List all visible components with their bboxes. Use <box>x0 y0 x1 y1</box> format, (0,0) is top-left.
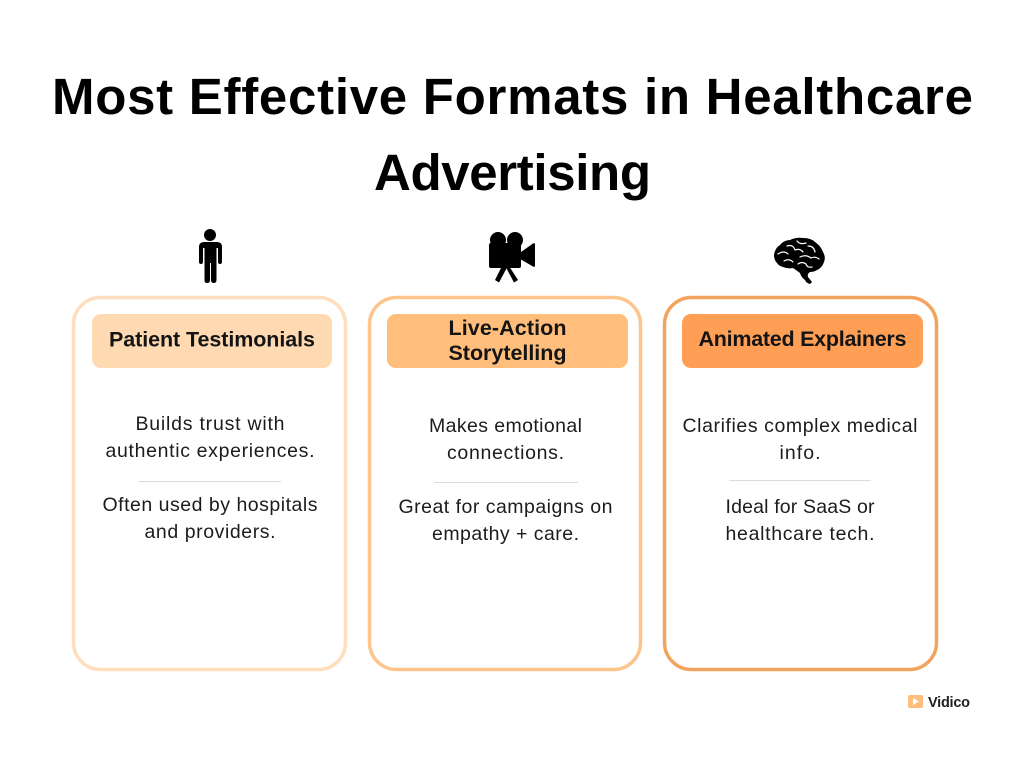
title: Most Effective Formats in Healthcare <box>52 68 973 125</box>
title <box>52 68 973 201</box>
body text: Makes emotional <box>429 415 582 437</box>
card outline <box>664 298 936 670</box>
body text: Ideal for SaaS or <box>726 496 875 518</box>
logo: Vidico <box>908 695 970 711</box>
body text: info. <box>780 442 820 464</box>
card outline <box>370 298 640 670</box>
body text <box>398 415 612 545</box>
heading pill: Patient Testimonials <box>109 328 315 352</box>
icon: film camera <box>489 232 535 282</box>
body text: connections. <box>447 442 564 464</box>
heading pill: Animated Explainers <box>698 327 907 351</box>
heading pill <box>387 314 628 368</box>
title: Advertising <box>374 144 651 201</box>
body text: Builds trust with <box>136 413 284 435</box>
body text <box>682 415 918 545</box>
body text: and providers. <box>144 521 276 543</box>
body text <box>102 413 318 543</box>
card outline <box>74 298 346 670</box>
heading pill <box>682 314 923 368</box>
panel: Animated Explainers <box>664 298 936 670</box>
icon: brain <box>774 238 825 284</box>
body text: Great for campaigns on <box>398 496 612 518</box>
icon: person <box>199 229 222 283</box>
heading pill <box>92 314 332 368</box>
body text: empathy + care. <box>432 523 579 545</box>
logo: Vidico: Vidico <box>928 695 970 711</box>
body text: authentic experiences. <box>106 440 314 462</box>
heading pill: Live-Action <box>448 316 566 340</box>
body text: Clarifies complex medical <box>682 415 918 437</box>
panel: Live-Action Storytelling <box>370 298 640 670</box>
heading pill: Storytelling <box>448 341 566 365</box>
body text: Often used by hospitals <box>102 494 318 516</box>
panel: Patient Testimonials <box>74 298 346 670</box>
body text: healthcare tech. <box>726 523 874 545</box>
